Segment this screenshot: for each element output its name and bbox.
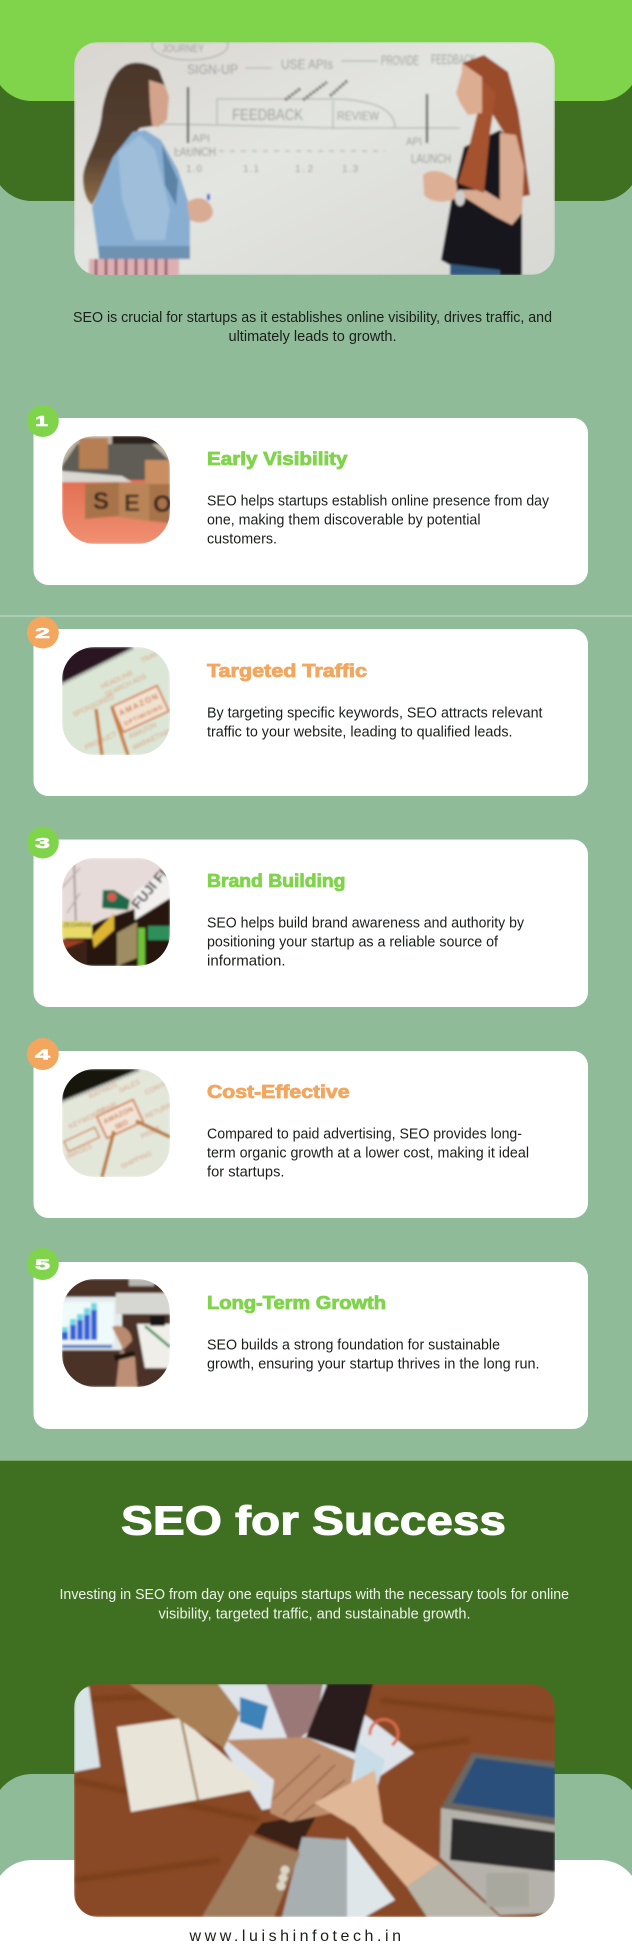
- photo: Amazon SEO notebook: RATINGS: [88, 1081, 119, 1101]
- bottom photo: team hands stacked on a table: [74, 1684, 555, 1917]
- photo: tablet with bar chart: [62, 1279, 170, 1387]
- photo: Amazon optimising notebook: SEARCH ADS: [104, 673, 148, 699]
- photo: Amazon optimising notebook: SPONSORED: [72, 694, 115, 719]
- body text: positioning your startup as a reliable source of: [207, 934, 499, 950]
- closing text: visibility, targeted traffic, and sustainable growth.: [158, 1606, 470, 1622]
- hero photo: two women at a whiteboard: LAUNCH: [174, 145, 216, 159]
- heading: Long-Term Growth: [207, 1293, 386, 1313]
- photo: Amazon optimising notebook: OPTIMISING: [123, 704, 164, 728]
- hero photo: two women at a whiteboard: 1.3: [342, 164, 358, 175]
- badge 3: 3: [35, 835, 50, 852]
- hero photo: two women at a whiteboard: 1.1: [243, 164, 259, 175]
- intro text: SEO is crucial for startups as it establishes online visibility, drives traffic, and: [73, 309, 552, 326]
- photo: SEO wooden blocks: [62, 436, 172, 544]
- photo: Amazon SEO notebook: PRICE: [140, 1125, 163, 1141]
- body text: information.: [207, 952, 286, 970]
- photo: Amazon SEO notebook: SEO: [114, 1119, 130, 1131]
- photo: Amazon optimising notebook: AMAZON: [117, 692, 160, 718]
- body text: [207, 1126, 529, 1180]
- hero photo: two women at a whiteboard: JOURNEY: [162, 43, 205, 55]
- photo: Amazon SEO notebook: IMAGES: [66, 1143, 94, 1161]
- hero photo: two women at a whiteboard: [74, 30, 555, 276]
- photo: Amazon SEO notebook: KEYWORDS: [68, 1107, 108, 1131]
- photo: Amazon optimising notebook: HEADLINE: [100, 670, 135, 691]
- body text: SEO helps build brand awareness and authority by: [207, 914, 524, 932]
- hero photo: two women at a whiteboard: LAUNCH: [411, 151, 451, 166]
- body text: [207, 492, 549, 548]
- badge 1: 1: [35, 413, 48, 430]
- photo: Amazon SEO notebook: RETURN: [144, 1102, 173, 1121]
- badge 1: [27, 405, 59, 437]
- photo: Amazon SEO notebook: PRIME: [96, 1101, 119, 1117]
- body text: SEO helps startups establish online presence from day: [207, 492, 549, 510]
- intro text: ultimately leads to growth.: [228, 328, 396, 345]
- body text: [207, 704, 543, 740]
- photo: SEO wooden blocks: E: [124, 490, 140, 517]
- photo: shop signs: [62, 858, 170, 966]
- badge 5: [27, 1248, 59, 1280]
- photo: Amazon SEO notebook: CONVERT: [144, 1076, 178, 1097]
- hero photo: two women at a whiteboard: FEEDBACK: [431, 51, 476, 67]
- photo: Amazon optimising notebook: MARKETING: [132, 728, 173, 752]
- hero photo: two women at a whiteboard: API: [406, 136, 422, 148]
- body text: traffic to your website, leading to qualified leads.: [207, 724, 512, 740]
- heading: Targeted Traffic: [207, 661, 367, 681]
- badge 2: 2: [35, 625, 50, 642]
- header band: light green: [0, 0, 632, 101]
- left woman: [83, 63, 166, 205]
- badge 4: [27, 1038, 59, 1070]
- body text: term organic growth at a lower cost, making it ideal: [207, 1144, 529, 1162]
- hero photo: two women at a whiteboard: USE APIs: [281, 56, 333, 72]
- photo: SEO wooden blocks: O: [153, 491, 172, 518]
- photo: Amazon SEO notebook: SALES: [118, 1079, 142, 1095]
- body text: [207, 1336, 540, 1372]
- heading: Brand Building: [207, 871, 346, 891]
- hero photo: two women at a whiteboard: 1.2: [295, 164, 313, 175]
- footer band: pale green: [0, 1774, 632, 1945]
- photo: Amazon SEO notebook: SHIPPING: [120, 1150, 153, 1171]
- footer band: white: [0, 1860, 632, 1945]
- closing text: [60, 1586, 569, 1622]
- card 4: Cost-Effective: [27, 1038, 588, 1218]
- photo: shop signs: ZEOARAK: [63, 923, 92, 929]
- closing title: SEO for Success: [121, 1498, 506, 1544]
- footer website: www.luishinfotech.in: [188, 1928, 401, 1945]
- photo: Amazon optimising notebook: [62, 646, 173, 755]
- card 2: Targeted Traffic: [27, 616, 588, 796]
- badge 4: 4: [35, 1046, 51, 1064]
- hero photo: two women at a whiteboard: SIGN-UP: [187, 61, 238, 77]
- hero photo: two women at a whiteboard: API: [192, 133, 210, 145]
- badge 3: [27, 826, 59, 858]
- body text: customers.: [207, 530, 277, 548]
- body text: one, making them discoverable by potential: [207, 512, 480, 528]
- heading: Cost-Effective: [207, 1082, 350, 1102]
- photo: Amazon optimising notebook: PRODUCT: [84, 731, 119, 752]
- panel: closing dark green section: [0, 1460, 632, 1945]
- photo: SEO wooden blocks: S: [93, 488, 109, 515]
- body text: SEO builds a strong foundation for sustainable: [207, 1336, 500, 1354]
- photo: Amazon SEO notebook: [62, 1069, 178, 1177]
- photo: Amazon SEO notebook: AMAZON: [103, 1106, 135, 1126]
- body text: for startups.: [207, 1164, 284, 1180]
- hero photo: two women at a whiteboard: PROVIDE: [381, 52, 419, 68]
- card 1: Early Visibility: [27, 405, 588, 585]
- intro text: [73, 309, 552, 345]
- photo: Amazon optimising notebook: TRAFFIC: [140, 646, 170, 665]
- body text: [207, 914, 524, 970]
- closing text: Investing in SEO from day one equips startups with the necessary tools for online: [60, 1586, 569, 1603]
- body text: Compared to paid advertising, SEO provides long-: [207, 1126, 522, 1142]
- card 5: Long-Term Growth: [27, 1248, 588, 1429]
- hero photo: two women at a whiteboard: FEEDBACK: [232, 107, 303, 124]
- body text: growth, ensuring your startup thrives in the long run.: [207, 1356, 540, 1372]
- card 3: Brand Building: [27, 826, 588, 1007]
- heading: Early Visibility: [207, 449, 348, 469]
- badge 2: [27, 616, 59, 648]
- body text: By targeting specific keywords, SEO attracts relevant: [207, 704, 543, 722]
- photo: shop signs: FUJI FI: [128, 866, 170, 912]
- badge 5: 5: [35, 1256, 50, 1274]
- hero photo: two women at a whiteboard: 1.0: [186, 164, 202, 175]
- right woman: [441, 130, 522, 275]
- hero photo: two women at a whiteboard: REVIEW: [337, 109, 380, 123]
- photo: Amazon optimising notebook: AMAZON: [128, 722, 158, 741]
- header band: dark green: [0, 0, 632, 201]
